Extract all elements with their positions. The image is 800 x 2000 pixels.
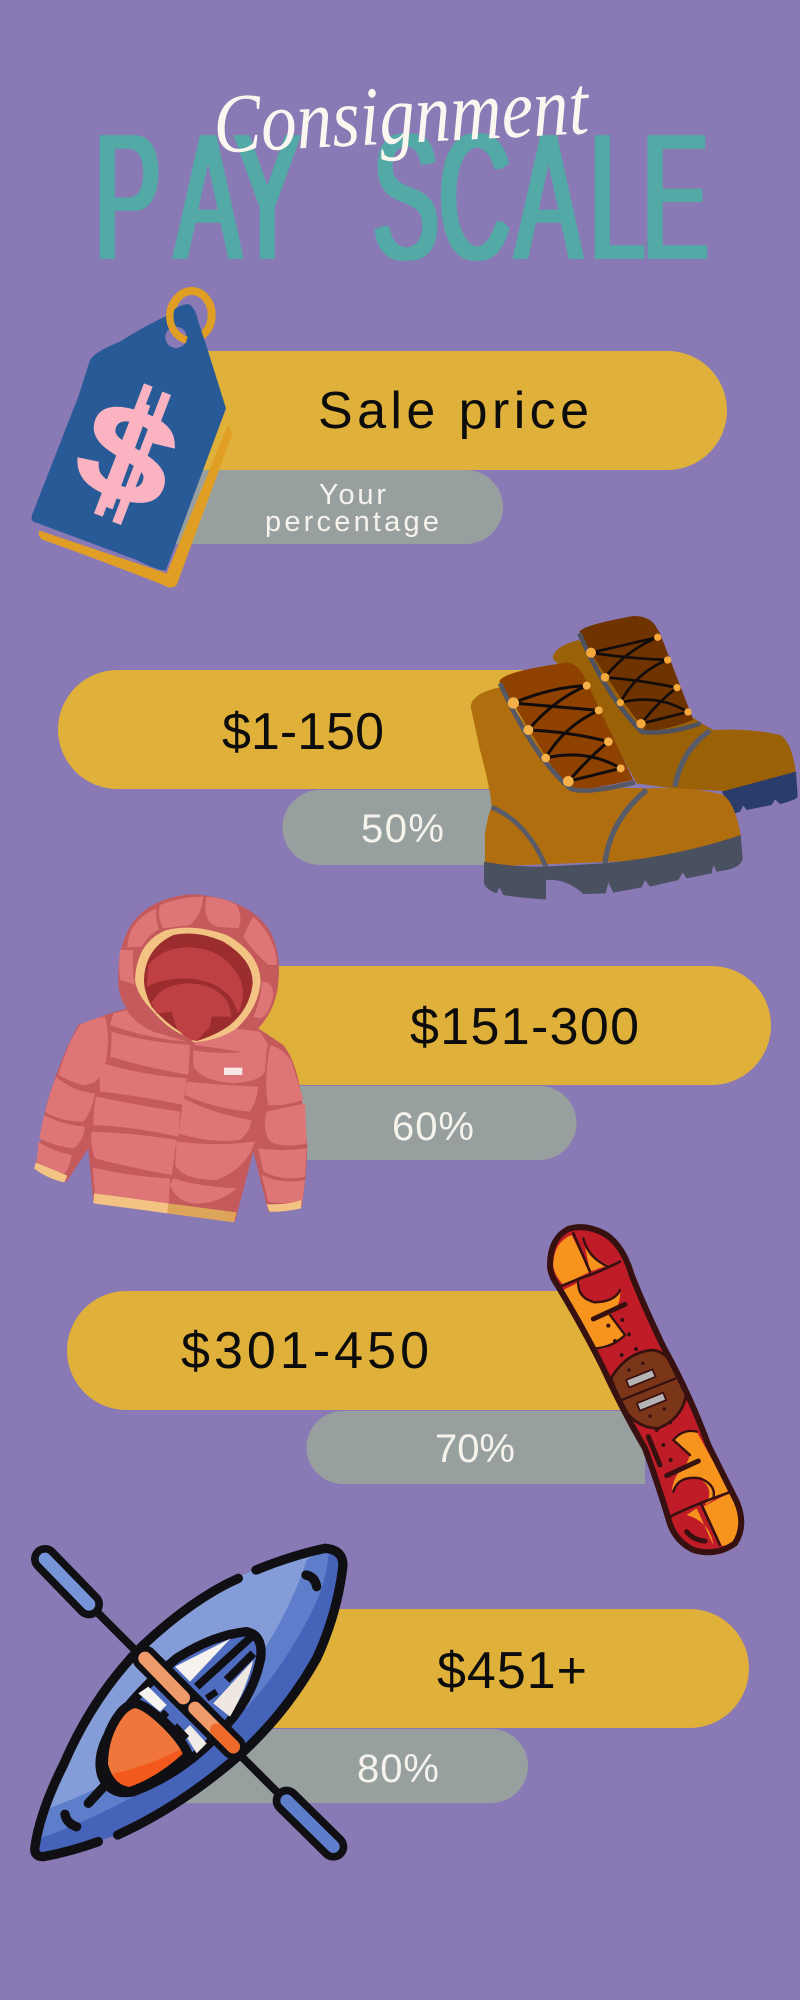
title: PAY SCALE: PAY SCALE xyxy=(95,95,708,297)
bar: 50%: 50% xyxy=(361,807,444,851)
icon: price tag: $ xyxy=(56,367,198,542)
bar: 60% xyxy=(260,1086,576,1160)
bar: 60%: 60% xyxy=(392,1105,474,1149)
cockpit xyxy=(100,1632,261,1793)
bindings xyxy=(611,1350,687,1428)
bar: sale price: Sale price xyxy=(318,382,589,440)
bar: 70%: 70% xyxy=(435,1427,515,1471)
bar: your percentage: percentage xyxy=(265,506,439,538)
icon: puffer jacket xyxy=(34,894,307,1222)
bar: 80% xyxy=(170,1729,528,1803)
quilted puffs xyxy=(37,897,307,1213)
icon: kayak with paddle xyxy=(34,1548,344,1857)
bar: $1-150: $1-150 xyxy=(222,703,384,761)
kayak hull xyxy=(34,1548,344,1857)
bar: $151-300: $151-300 xyxy=(410,998,639,1056)
bar: $451+: $451+ xyxy=(437,1642,587,1700)
bar: sale price xyxy=(120,351,727,470)
hood opening xyxy=(135,928,261,1042)
row: $151-300 xyxy=(34,894,771,1222)
row: $1-150 xyxy=(58,616,798,899)
paddle xyxy=(45,1559,333,1847)
bar: $451+ xyxy=(250,1609,749,1728)
row: sale price header xyxy=(31,291,727,587)
jacket silhouette xyxy=(34,894,307,1222)
icon: price tag xyxy=(31,291,232,587)
bar: your percentage: Your xyxy=(319,479,386,511)
bar: $1-150 xyxy=(58,670,618,789)
bar: $301-450: $301-450 xyxy=(181,1322,429,1380)
bar: your percentage xyxy=(130,470,503,544)
bar: $151-300 xyxy=(220,966,771,1085)
icon: snowboard xyxy=(550,1227,741,1552)
rear boot xyxy=(553,616,798,813)
row: $301-450 xyxy=(67,1227,741,1552)
title: Consignment: Consignment xyxy=(211,59,593,172)
icon: hiking boots xyxy=(471,616,798,899)
bar: 80%: 80% xyxy=(357,1747,439,1791)
row: $451+ xyxy=(34,1548,749,1857)
bar: $301-450 xyxy=(67,1291,640,1410)
seat xyxy=(103,1703,188,1792)
front boot xyxy=(471,663,743,899)
bar: 70% xyxy=(306,1411,645,1484)
bar: 50% xyxy=(283,790,520,865)
trim and chest patch xyxy=(34,1068,302,1222)
